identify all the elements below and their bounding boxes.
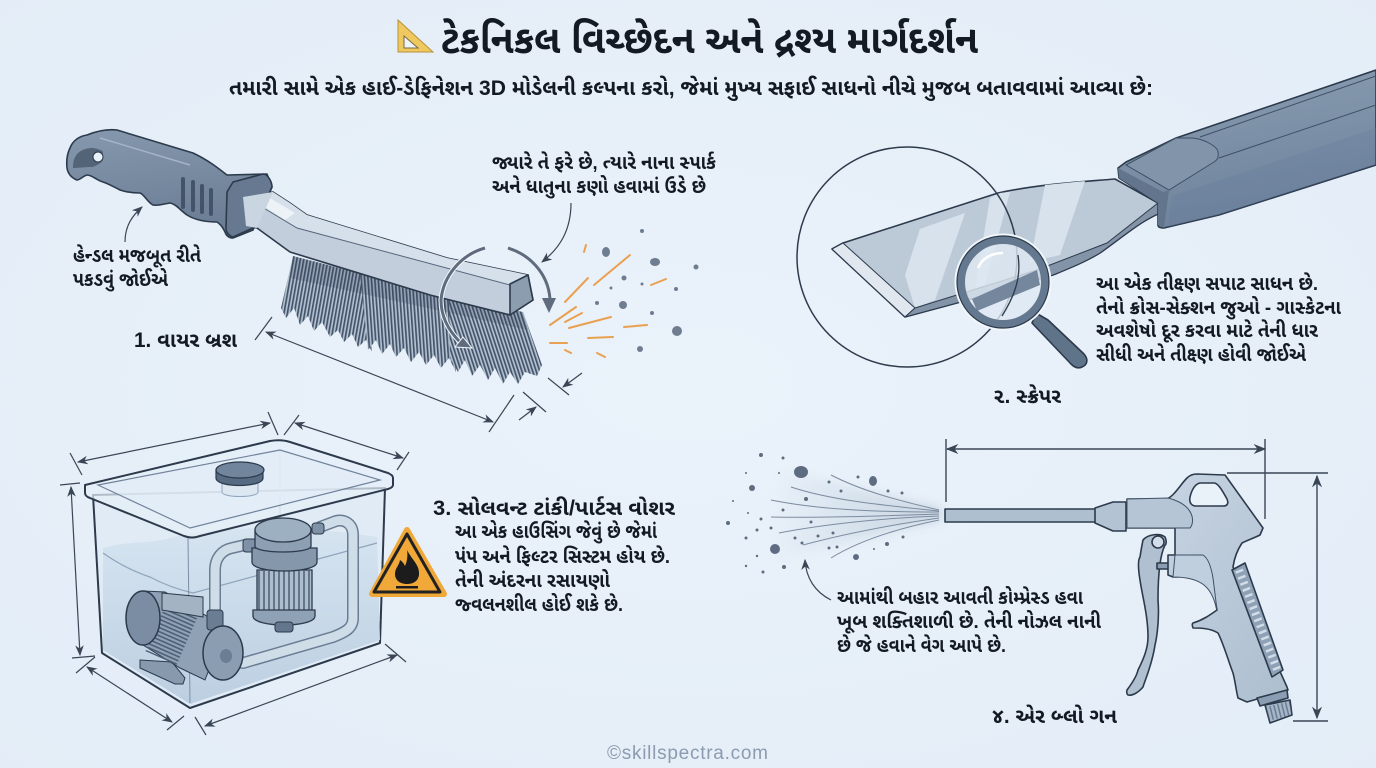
detail circle xyxy=(797,147,1017,367)
tank body xyxy=(93,450,385,708)
text: tank note: જ્વલનશીલ હોઈ શકે છે. xyxy=(455,592,623,616)
panel: solvent tank xyxy=(60,412,675,735)
pipes xyxy=(215,521,353,663)
scraper blade xyxy=(832,179,1158,317)
brush handle xyxy=(67,130,273,238)
text: sparks note xyxy=(492,150,716,198)
panel: scraper xyxy=(797,70,1376,408)
text: scraper note: અવશેષો દૂર કરવા માટે તેની ધાર xyxy=(1096,318,1319,342)
tank cap xyxy=(216,462,264,496)
text: scraper note: તેનો ક્રોસ-સેક્શન જુઓ - ગાસ્કેટના xyxy=(1096,295,1341,319)
rotation arrow xyxy=(441,248,556,348)
title: ટેકનિકલ વિચ્છેદન અને દ્રશ્ય માર્ગદર્શન xyxy=(441,17,978,62)
text: tank note xyxy=(455,519,670,616)
air spray xyxy=(726,453,942,574)
gun trigger xyxy=(1127,535,1166,695)
panel: air blow gun xyxy=(726,439,1328,728)
subtitle: તમારી સામે એક હાઈ-ડેફિનેશન 3D મોડેલની કલ્પના કરો, જેમાં મુખ્ય સફાઈ સાધનો નીચે મુજબ બતાવવામાં આવ્યા છે: xyxy=(229,75,1153,101)
text: handle note: પકડવું જોઈએ xyxy=(73,267,169,291)
metal particles xyxy=(595,229,698,352)
gun fitting xyxy=(1257,690,1292,723)
scraper handle xyxy=(1118,70,1376,228)
filter canister xyxy=(243,518,324,632)
panel: wire brush xyxy=(67,130,716,432)
icon: flammable warning xyxy=(372,530,444,594)
tank dimension lines xyxy=(60,412,409,735)
text: handle note xyxy=(73,243,202,291)
arrow: sparks callout xyxy=(542,203,571,262)
label: scraper: ૨. સ્ક્રેપર xyxy=(993,383,1061,408)
text: handle note: હેન્ડલ મજબૂત રીતે xyxy=(73,243,202,267)
text: tank heading: 3. સોલવન્ટ ટાંકી/પાર્ટસ વોશર xyxy=(433,496,675,520)
icon: set square ruler xyxy=(398,20,433,52)
text: scraper note: સીધી અને તીક્ષ્ણ હોવી જોઈએ xyxy=(1096,342,1307,366)
brush bristles xyxy=(281,256,542,384)
text: sparks note: અને ધાતુના કણો હવામાં ઉડે છે xyxy=(492,174,706,198)
text: tank note: તેની અંદરના રસાયણો xyxy=(455,568,610,592)
gun body xyxy=(1127,474,1288,702)
gun nozzle xyxy=(945,502,1126,531)
pump motor xyxy=(126,591,243,684)
text: scraper note: આ એક તીક્ષ્ણ સપાટ સાધન છે. xyxy=(1096,271,1318,295)
text: tank note: પંપ અને ફિલ્ટર સિસ્ટમ હોય છે. xyxy=(455,544,670,568)
text: sparks note: જ્યારે તે ફરે છે, ત્યારે નાના સ્પાર્ક xyxy=(492,150,716,174)
arrow: air callout xyxy=(805,560,831,600)
gun dimension lines xyxy=(946,439,1328,721)
icon: magnifying glass xyxy=(957,236,1087,368)
text: air note xyxy=(837,585,1101,657)
sparks xyxy=(550,245,666,357)
brush dimension lines xyxy=(255,317,582,432)
text: tank note: આ એક હાઉસિંગ જેવું છે જેમાં xyxy=(455,519,657,543)
text: air note: છે જે હવાને વેગ આપે છે. xyxy=(837,633,1006,657)
tank lid xyxy=(85,440,393,538)
label: wire brush: 1. વાયર બ્રશ xyxy=(134,329,237,352)
text: air note: ખૂબ શક્તિશાળી છે. તેની નોઝલ નાની xyxy=(837,609,1101,633)
text: air note: આમાંથી બહાર આવતી કોમ્પ્રેસ્ડ હવા xyxy=(837,585,1083,609)
label: air blow gun: ૪. એર બ્લો ગન xyxy=(992,704,1117,728)
text: scraper note xyxy=(1096,271,1341,366)
brush metal shank xyxy=(243,192,533,315)
arrow: handle callout xyxy=(125,207,142,242)
footer credit: ©skillspectra.com xyxy=(607,743,768,764)
